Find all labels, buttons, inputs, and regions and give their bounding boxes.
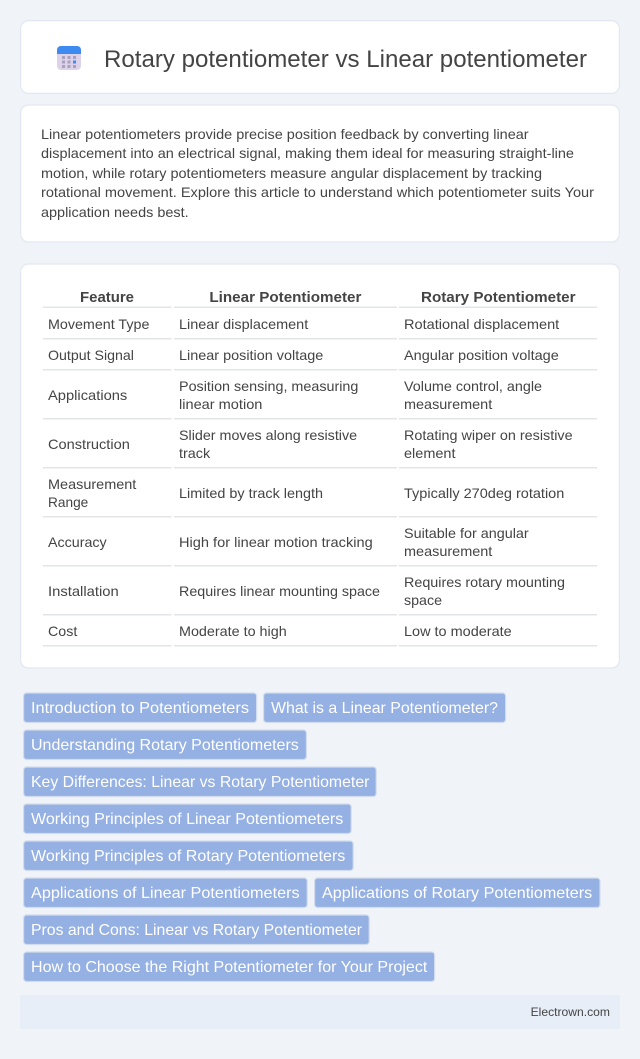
tag: introduction — [24, 693, 257, 722]
intro text block — [41, 126, 594, 220]
row: cost: Cost — [48, 623, 77, 639]
tag: applications linear: Applications of Linear Potentiometers — [31, 885, 300, 902]
row: construction: Slider moves along resistive — [179, 427, 357, 443]
intro text block: displacement into an electrical signal, making them ideal for measuring straight-line — [41, 145, 574, 161]
title: Rotary potentiometer vs Linear potentiometer — [104, 46, 587, 73]
intro text block: application needs best. — [41, 204, 189, 220]
tag: how to choose: How to Choose the Right Potentiometer for Your Project — [31, 959, 428, 976]
tag: understanding rotary: Understanding Rotary Potentiometers — [31, 737, 299, 754]
row: cost: Moderate to high — [179, 623, 287, 639]
row: measurement range — [48, 476, 564, 510]
tag: applications rotary: Applications of Rotary Potentiometers — [322, 885, 592, 902]
intro text block: rotational movement. Explore this article to understand which potentiometer suits Your — [41, 184, 594, 200]
footer bar: Electrown.com — [531, 1005, 610, 1019]
row: movement type — [48, 316, 559, 332]
table header row: Rotary Potentiometer — [421, 290, 576, 306]
tag: working principles linear: Working Principles of Linear Potentiometers — [31, 811, 343, 828]
row: construction: Construction — [48, 436, 130, 452]
row: measurement range: Limited by track length — [179, 485, 323, 501]
row: cost: Low to moderate — [404, 623, 512, 639]
tag: key differences: Key Differences: Linear vs Rotary Potentiometer — [31, 774, 370, 791]
row: measurement range: Measurement — [48, 476, 136, 492]
row: cost — [48, 623, 512, 639]
row: construction: element — [404, 445, 456, 461]
row: movement type: Linear displacement — [179, 316, 308, 332]
tag: how to choose — [24, 952, 435, 982]
row: applications — [48, 378, 542, 412]
footer bar — [20, 995, 620, 1029]
tag: working principles linear — [24, 804, 351, 834]
tag: pros and cons: Pros and Cons: Linear vs Rotary Potentiometer — [31, 922, 363, 939]
row: output signal: Angular position voltage — [404, 347, 559, 363]
row: applications: Position sensing, measuring — [179, 378, 358, 394]
tag: pros and cons — [24, 915, 369, 944]
table header row: Feature — [80, 290, 134, 306]
row: construction: track — [179, 445, 211, 461]
row: accuracy: Accuracy — [48, 534, 107, 550]
row: applications: linear motion — [179, 396, 262, 412]
tag: working principles rotary: Working Principles of Rotary Potentiometers — [31, 848, 345, 865]
row: applications: Applications — [48, 387, 127, 403]
tag: introduction: Introduction to Potentiometers — [31, 700, 249, 717]
row: movement type: Rotational displacement — [404, 316, 559, 332]
row: accuracy — [48, 525, 529, 559]
icon: calendar — [57, 46, 81, 70]
row: installation: Requires rotary mounting — [404, 574, 565, 590]
panel: comparison table — [21, 264, 619, 668]
row: output signal — [48, 347, 559, 363]
tag: applications linear — [24, 878, 307, 908]
tag: key differences — [24, 767, 376, 796]
row: applications: measurement — [404, 396, 492, 412]
panel: title header — [21, 21, 619, 93]
row: installation — [48, 574, 565, 608]
tag: what is linear: What is a Linear Potentiometer? — [271, 700, 498, 717]
row: output signal: Output Signal — [48, 347, 134, 363]
row: installation: space — [404, 592, 442, 608]
tag: what is linear — [264, 693, 506, 722]
tag: working principles rotary — [24, 841, 353, 870]
row: movement type: Movement Type — [48, 316, 150, 332]
row: applications: Volume control, angle — [404, 378, 542, 394]
row: installation: Installation — [48, 583, 119, 599]
row: accuracy: Suitable for angular — [404, 525, 529, 541]
row: measurement range: Range — [48, 494, 88, 510]
panel: intro description — [21, 105, 619, 242]
row: output signal: Linear position voltage — [179, 347, 324, 363]
row: construction: Rotating wiper on resistive — [404, 427, 573, 443]
row: accuracy: High for linear motion tracking — [179, 534, 373, 550]
row: accuracy: measurement — [404, 543, 492, 559]
row: measurement range: Typically 270deg rotation — [404, 485, 564, 501]
table header row: Linear Potentiometer — [209, 290, 362, 306]
tag: applications rotary — [315, 878, 600, 908]
tag: understanding rotary — [24, 730, 306, 760]
table header row — [80, 290, 576, 306]
row: installation: Requires linear mounting space — [179, 583, 380, 599]
row: construction — [48, 427, 573, 461]
intro text block: motion, while rotary potentiometers measure angular displacement by tracking — [41, 165, 542, 181]
panel: topic tags — [24, 693, 600, 982]
intro text block: Linear potentiometers provide precise position feedback by converting linear — [41, 126, 529, 142]
